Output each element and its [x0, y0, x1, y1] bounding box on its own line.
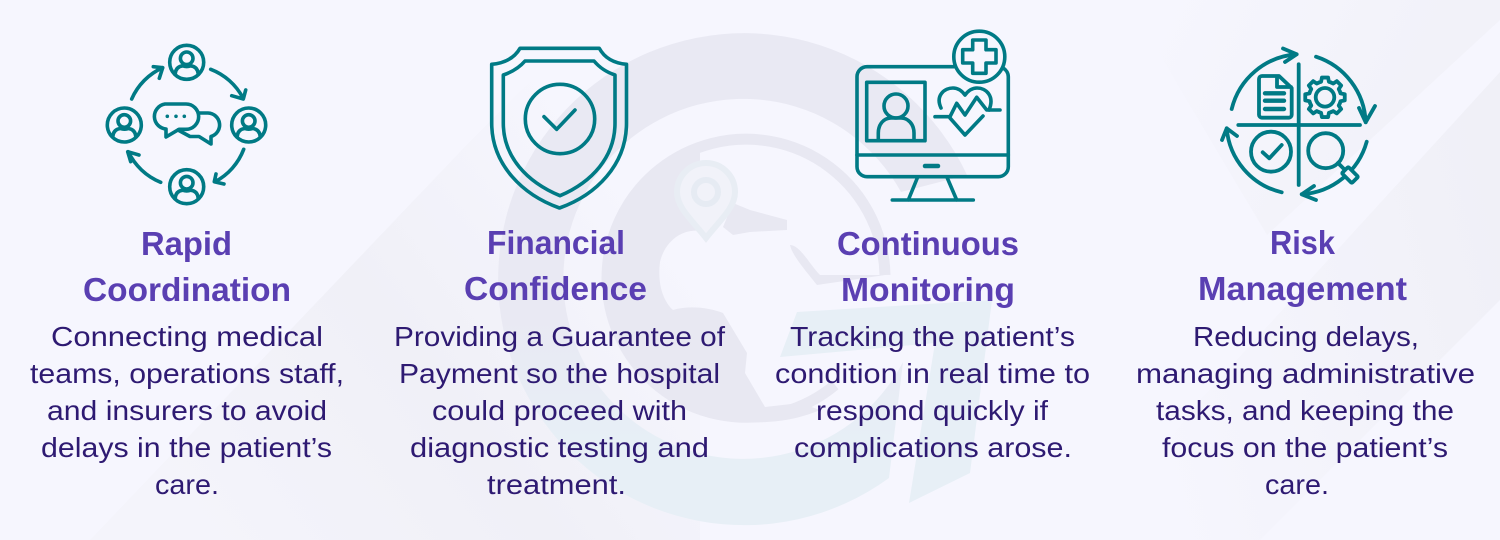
heading: financial confidence: Financial [487, 224, 625, 261]
heading: risk management: Management [1198, 270, 1407, 307]
text block: risk management: managing administrative [1136, 358, 1475, 389]
panel: continuous monitoring [775, 31, 1090, 463]
text block: financial confidence: Providing a Guarantee of [394, 321, 725, 352]
heading: risk management [1198, 224, 1407, 307]
icon: people in a communication loop [107, 45, 266, 204]
heading: continuous monitoring: Continuous [837, 225, 1019, 262]
text block: continuous monitoring: complications arose. [794, 432, 1072, 463]
heading: financial confidence: Confidence [464, 270, 647, 307]
icon: risk management cycle [1222, 48, 1375, 200]
text block: rapid coordination: teams, operations staff, [30, 358, 344, 389]
text block: rapid coordination: and insurers to avoid [47, 395, 327, 426]
heading: continuous monitoring: Monitoring [841, 271, 1015, 308]
heading: continuous monitoring [837, 225, 1019, 308]
heading: rapid coordination [83, 225, 291, 308]
globe upper continent [723, 203, 787, 235]
icon: monitor with patient, heartbeat and medical cross [857, 31, 1008, 200]
outer C ring of watermark [498, 33, 967, 525]
heading: financial confidence [464, 224, 647, 307]
text block: rapid coordination: delays in the patient’s [41, 432, 332, 463]
globe right continent [790, 245, 885, 285]
text block: financial confidence: Payment so the hospital [399, 358, 720, 389]
text block: continuous monitoring: respond quickly if [816, 395, 1048, 426]
heading: rapid coordination: Coordination [83, 271, 291, 308]
panel: rapid coordination [30, 45, 344, 500]
globe left and lower continents [603, 145, 820, 422]
panel: risk management [1136, 48, 1475, 500]
text block: risk management: tasks, and keeping the [1156, 395, 1454, 426]
globe ring [607, 139, 885, 417]
text block: rapid coordination: care. [155, 469, 219, 500]
text block: continuous monitoring: condition in real time to [775, 358, 1090, 389]
G crossbar of watermark [780, 300, 992, 503]
text block: continuous monitoring [775, 321, 1090, 463]
heading: risk management: Risk [1270, 224, 1336, 261]
text block: risk management [1136, 321, 1475, 500]
text block: financial confidence: diagnostic testing and [410, 432, 709, 463]
text block: financial confidence: treatment. [487, 469, 626, 500]
panel: financial confidence [394, 48, 725, 500]
text block: risk management: focus on the patient’s [1162, 432, 1448, 463]
text block: financial confidence: could proceed with [432, 395, 687, 426]
icon: shield with check [492, 48, 626, 208]
text block: risk management: Reducing delays, [1193, 321, 1419, 352]
text block: financial confidence [394, 321, 725, 500]
text block: rapid coordination [30, 321, 344, 500]
location pin watermark [677, 163, 735, 238]
text block: risk management: care. [1265, 469, 1329, 500]
heading: rapid coordination: Rapid [141, 225, 232, 262]
text block: continuous monitoring: Tracking the patient’s [790, 321, 1075, 352]
text block: rapid coordination: Connecting medical [51, 321, 323, 352]
